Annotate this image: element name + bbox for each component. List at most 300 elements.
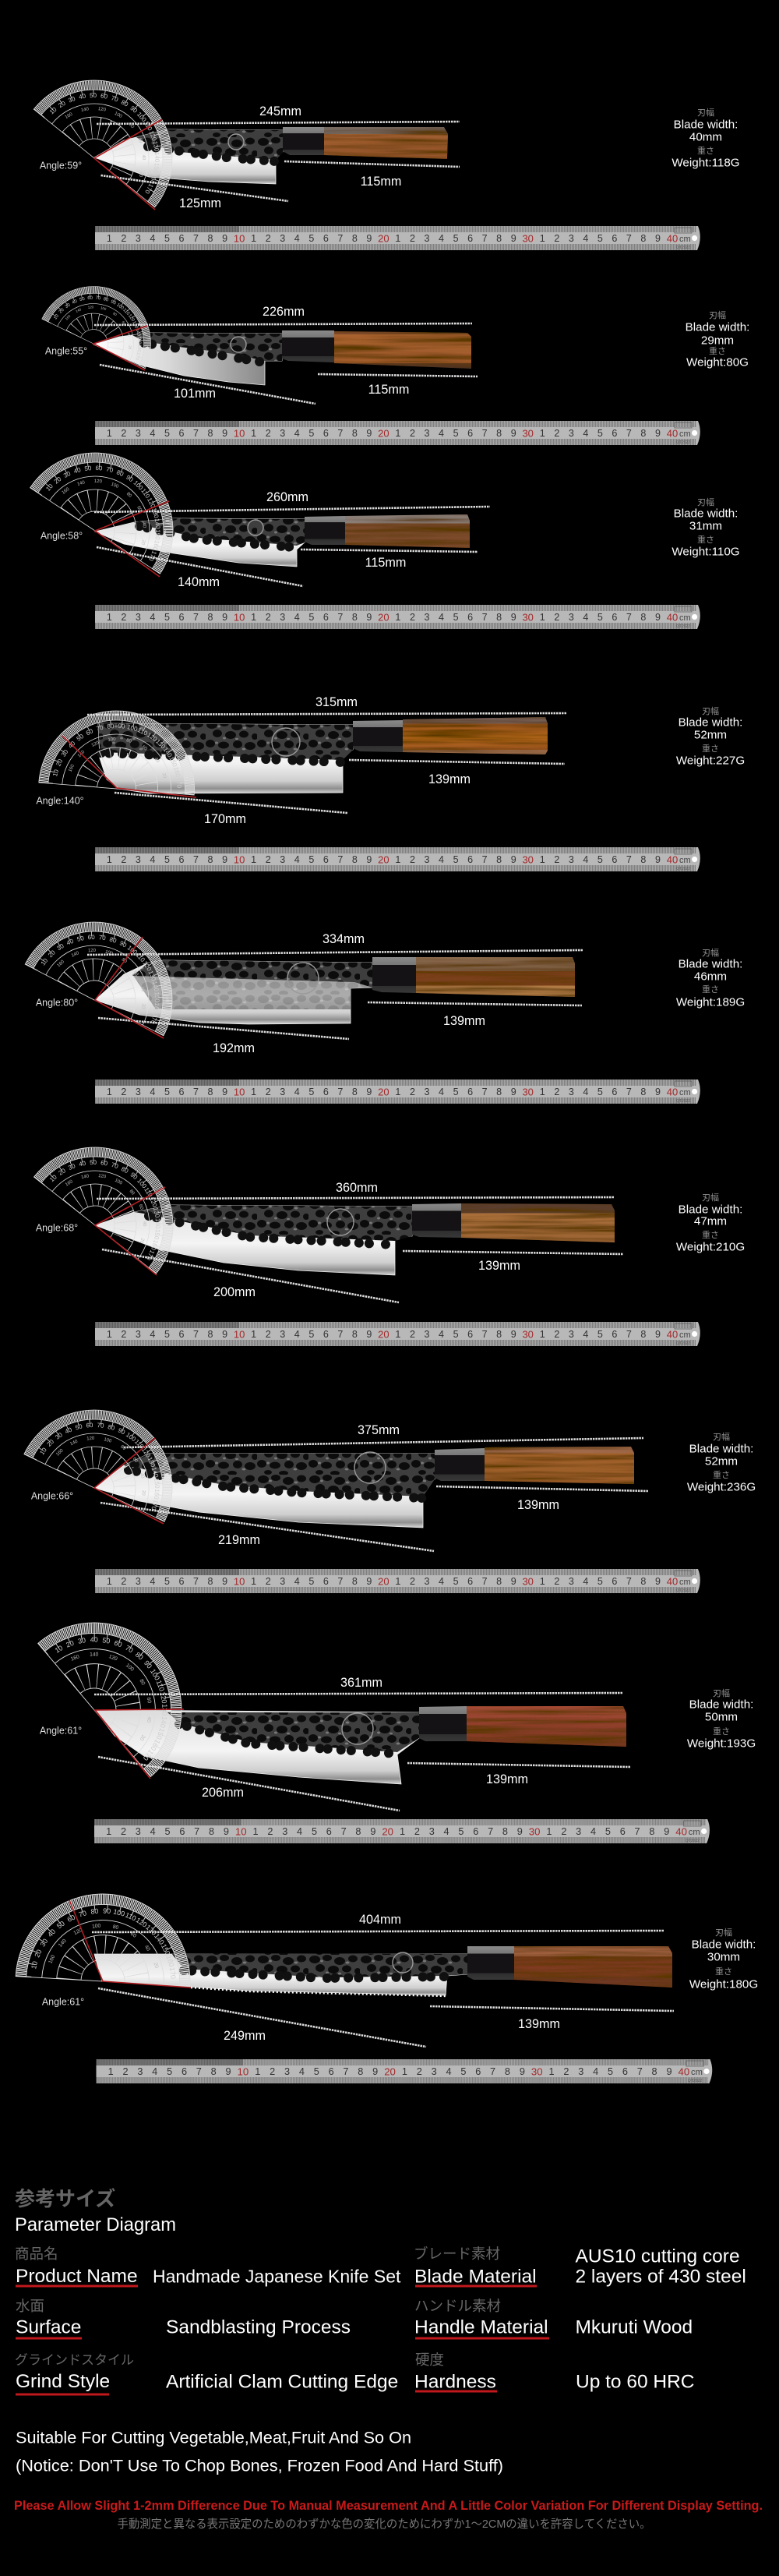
protractor: 80 <box>138 1678 146 1687</box>
protractor: 140 <box>153 152 160 163</box>
ruler: 123456789123456789123456789123456789 <box>107 1329 661 1340</box>
ruler: 40 <box>678 2066 689 2077</box>
panel: knife 6 <box>34 1116 745 1346</box>
protractor: 100 <box>132 479 145 492</box>
ruler: 10 <box>234 611 245 624</box>
row: grind style: Grind Style <box>16 2371 110 2392</box>
length labels: 206mm <box>202 1786 244 1800</box>
protractor: 10 <box>53 313 60 320</box>
protractor: 120 <box>141 959 153 973</box>
protractor: 150 <box>167 756 178 769</box>
protractor: 90 <box>129 1171 139 1181</box>
protractor: 170 <box>147 549 158 563</box>
ruler: 123456789123456789123456789123456789 <box>108 2066 672 2077</box>
blade specs: 刃幅 <box>713 1688 730 1698</box>
ruler: cm <box>679 1330 691 1340</box>
blade specs: Weight:227G <box>676 754 745 767</box>
panel: knife 4 <box>36 695 745 871</box>
protractor: 110 <box>124 1911 137 1922</box>
heading: Parameter Diagram <box>15 2214 176 2235</box>
protractor: 160 <box>165 1954 175 1968</box>
ruler: 40 <box>667 611 678 624</box>
angle marker <box>95 937 164 1038</box>
length labels: 361mm <box>340 1676 382 1690</box>
protractor: 60 <box>100 92 108 101</box>
row: blade material: AUS10 cutting core <box>575 2246 740 2267</box>
protractor: 140 <box>134 328 141 337</box>
ruler: QT2022 <box>676 440 690 445</box>
blade specs: 刃幅 <box>715 1928 732 1938</box>
ruler: 30 <box>522 1576 534 1587</box>
protractor: 100 <box>115 302 125 311</box>
protractor: 160 <box>65 112 74 120</box>
protractor: 160 <box>62 487 71 496</box>
protractor: 10 <box>44 482 55 493</box>
protractor: 120 <box>140 1447 152 1459</box>
protractor: 70 <box>98 934 107 942</box>
ruler: 123456789123456789123456789123456789 <box>107 854 661 865</box>
row: handle material: Mkuruti Wood <box>575 2316 693 2338</box>
blade specs: Weight:110G <box>671 546 740 558</box>
row: handle material: ハンドル素材 <box>414 2298 501 2314</box>
blade specs <box>671 497 740 558</box>
blade <box>95 960 372 1024</box>
blade specs: 52mm <box>705 1454 738 1468</box>
protractor: 50 <box>76 733 86 743</box>
protractor: 170 <box>143 182 155 196</box>
panel: knife 1 <box>33 48 740 250</box>
panel: knife 5 <box>25 895 745 1104</box>
blade <box>95 1710 419 1784</box>
protractor: 70 <box>105 465 115 474</box>
protractor: 40 <box>46 1928 57 1938</box>
ruler: 10 <box>234 427 245 440</box>
protractor: 140 <box>153 518 161 530</box>
protractor: 120 <box>88 305 94 309</box>
protractor: 100 <box>126 944 139 956</box>
ruler <box>95 226 700 250</box>
protractor: 20 <box>128 345 132 350</box>
protractor: 160 <box>70 1654 80 1663</box>
protractor: 130 <box>152 1207 161 1219</box>
protractor: 90 <box>125 474 135 483</box>
protractor: 20 <box>137 171 143 178</box>
protractor: 140 <box>153 1932 166 1946</box>
angle label: Angle:80° <box>36 998 78 1009</box>
protractor: 20 <box>57 100 67 109</box>
length labels: 115mm <box>365 556 406 570</box>
protractor: 130 <box>144 1923 158 1937</box>
row: blade material: 2 layers of 430 steel <box>575 2267 746 2287</box>
protractor: 110 <box>136 726 149 737</box>
protractor: 130 <box>154 738 167 751</box>
protractor: 160 <box>68 763 76 773</box>
row: handle material: Handle Material <box>414 2316 548 2338</box>
protractor: 140 <box>90 1652 99 1658</box>
protractor <box>38 1587 217 1777</box>
length labels: 139mm <box>478 1259 520 1273</box>
length labels <box>204 695 471 826</box>
measure lines <box>87 713 566 813</box>
usage note: Suitable For Cutting Vegetable,Meat,Fruit And So On <box>16 2429 411 2447</box>
protractor: 20 <box>140 1490 146 1496</box>
protractor: 140 <box>77 750 86 758</box>
protractor: 120 <box>148 129 158 143</box>
protractor: 30 <box>77 1636 86 1645</box>
blade specs: 刃幅 <box>702 948 719 958</box>
protractor: 100 <box>104 949 114 956</box>
row: hardness: Up to 60 HRC <box>576 2371 695 2393</box>
blade specs: 重さ <box>697 145 714 156</box>
protractor: 10 <box>48 106 58 116</box>
protractor: 80 <box>107 1423 116 1432</box>
protractor: 120 <box>146 731 159 744</box>
length labels: 139mm <box>518 2017 560 2031</box>
row: hardness: Hardness <box>414 2371 496 2393</box>
blade specs: 重さ <box>715 1966 732 1977</box>
protractor: 40 <box>139 986 145 993</box>
protractor: 100 <box>112 1907 125 1918</box>
protractor: 20 <box>65 1639 75 1649</box>
ruler <box>94 1819 710 1843</box>
ruler: cm <box>691 2068 703 2077</box>
panel: knife 2 <box>42 267 749 445</box>
length labels <box>178 490 406 589</box>
protractor: 80 <box>121 957 128 965</box>
blade specs <box>687 1432 756 1493</box>
protractor: 130 <box>147 970 157 982</box>
blade specs: 30mm <box>707 1950 740 1964</box>
protractor: 50 <box>79 297 86 302</box>
ruler: 10 <box>234 1576 245 1587</box>
blade specs: Blade width: <box>679 957 742 971</box>
protractor: 40 <box>78 1160 86 1168</box>
protractor: 20 <box>139 1733 146 1741</box>
measure lines <box>92 1931 674 2047</box>
ruler: QT2022 <box>676 1099 690 1104</box>
ruler: 30 <box>531 2066 543 2077</box>
protractor: 80 <box>90 1907 99 1916</box>
length labels: 139mm <box>428 772 471 786</box>
protractor: 150 <box>153 529 161 540</box>
protractor: 160 <box>172 766 182 779</box>
protractor <box>24 1384 198 1521</box>
protractor: 20 <box>58 1167 67 1177</box>
blade specs: Weight:80G <box>686 355 749 369</box>
length labels: 115mm <box>368 383 409 397</box>
handle <box>412 1203 615 1242</box>
protractor: 10 <box>38 1446 48 1456</box>
angle label: Angle:61° <box>42 1997 84 2008</box>
blade specs <box>687 1688 756 1751</box>
protractor: 160 <box>136 345 142 353</box>
protractor: 60 <box>113 1639 123 1648</box>
length labels: 360mm <box>336 1181 378 1195</box>
protractor: 80 <box>120 1165 130 1175</box>
protractor: 150 <box>153 1478 160 1489</box>
protractor: 160 <box>57 959 65 968</box>
length labels: 170mm <box>204 812 246 826</box>
ruler: 10 <box>235 1826 247 1837</box>
angle label: Angle:68° <box>36 1222 78 1233</box>
protractor: 100 <box>125 1663 135 1673</box>
blade specs <box>676 706 745 767</box>
angle marker <box>95 1187 165 1275</box>
ruler <box>95 605 700 629</box>
protractor: 10 <box>54 1644 64 1655</box>
row: product name: Product Name <box>16 2266 138 2287</box>
ruler: cm <box>679 235 691 244</box>
ruler: cm <box>679 1578 691 1587</box>
protractor: 30 <box>62 470 72 479</box>
protractor: 120 <box>108 1654 118 1663</box>
blade specs: 刃幅 <box>697 497 714 507</box>
protractor: 80 <box>107 723 115 730</box>
protractor: 120 <box>148 1196 159 1209</box>
ruler: 10 <box>234 232 245 245</box>
protractor: 90 <box>118 723 125 730</box>
measure lines <box>100 1438 648 1551</box>
protractor: 140 <box>154 1218 161 1229</box>
disclaimer japanese: 手動測定と異なる表示設定のためのわずかな色の変化のためにわずか1～2CMの違いを許容してください。 <box>117 2518 651 2531</box>
protractor: 150 <box>152 162 160 174</box>
ruler: cm <box>679 856 691 865</box>
protractor: 80 <box>112 1924 119 1931</box>
protractor: 120 <box>91 740 100 748</box>
length labels <box>224 1913 560 2043</box>
ruler: 20 <box>378 232 390 245</box>
blade specs: 46mm <box>694 970 727 984</box>
protractor: 80 <box>112 311 118 317</box>
protractor: 40 <box>78 93 86 101</box>
protractor: 70 <box>111 1161 119 1170</box>
protractor: 80 <box>125 492 132 499</box>
protractor: 110 <box>143 1186 154 1199</box>
protractor: 20 <box>47 949 57 959</box>
measure lines <box>94 507 490 586</box>
length labels: 200mm <box>213 1285 256 1299</box>
protractor <box>42 267 170 369</box>
row: surface: Surface <box>16 2316 81 2338</box>
length labels: 139mm <box>443 1014 485 1028</box>
angle label: Angle:66° <box>31 1490 73 1501</box>
panel: knife 9 <box>16 1889 758 2083</box>
ruler: 20 <box>378 1576 390 1587</box>
row: blade material: Blade Material <box>414 2267 537 2287</box>
panel: knife 3 <box>30 422 740 629</box>
blade specs: 31mm <box>689 519 722 533</box>
protractor: 40 <box>73 466 82 475</box>
ruler: 30 <box>522 1328 534 1341</box>
protractor: 160 <box>55 1448 65 1458</box>
protractor <box>30 422 203 574</box>
angle marker <box>93 326 147 370</box>
ruler: 20 <box>378 854 390 865</box>
protractor: 140 <box>76 480 86 487</box>
protractor: 160 <box>149 1738 161 1752</box>
length labels <box>218 1423 559 1547</box>
protractor: 140 <box>58 1938 68 1949</box>
protractor: 140 <box>69 1440 79 1447</box>
protractor: 140 <box>159 1716 168 1729</box>
ruler: 10 <box>234 1087 245 1097</box>
row: product name <box>15 2246 401 2287</box>
protractor: 130 <box>146 1456 157 1468</box>
protractor: 60 <box>141 745 148 752</box>
protractor: 60 <box>66 1913 76 1924</box>
protractor: 120 <box>135 1916 149 1929</box>
protractor: 20 <box>33 1949 44 1959</box>
protractor: 40 <box>67 740 77 750</box>
protractor: 10 <box>51 769 60 777</box>
protractor: 40 <box>142 1221 146 1227</box>
row: surface <box>16 2298 351 2340</box>
handle <box>283 127 448 159</box>
protractor: 60 <box>132 970 139 977</box>
ruler: 40 <box>667 1328 678 1341</box>
blade specs: Blade width: <box>689 1698 753 1712</box>
protractor: 30 <box>55 942 65 952</box>
blade specs: 刃幅 <box>697 108 714 118</box>
blade specs: Blade width: <box>674 507 738 521</box>
length labels: 375mm <box>358 1423 400 1437</box>
length labels: 334mm <box>323 932 365 946</box>
length labels: 192mm <box>213 1041 255 1055</box>
angle marker <box>95 501 169 577</box>
protractor: 40 <box>90 1636 98 1644</box>
protractor <box>25 895 199 1036</box>
protractor: 170 <box>142 1748 155 1762</box>
protractor: 80 <box>120 98 130 108</box>
ruler: 20 <box>378 611 390 624</box>
angle marker <box>62 736 196 797</box>
protractor: 150 <box>155 1727 166 1740</box>
blade specs: 47mm <box>694 1214 727 1228</box>
protractor: 70 <box>96 724 104 733</box>
protractor: 50 <box>90 92 97 99</box>
length labels: 125mm <box>179 196 221 210</box>
protractor: 110 <box>155 1679 166 1692</box>
protractor: 140 <box>150 1467 160 1479</box>
protractor: 100 <box>114 1178 123 1186</box>
row: hardness: 硬度 <box>415 2352 444 2368</box>
blade <box>95 1205 412 1275</box>
blade specs: Weight:180G <box>689 1978 758 1991</box>
ruler: cm <box>689 1828 700 1837</box>
angle label: Angle:58° <box>41 530 83 541</box>
blade specs: 重さ <box>702 743 719 754</box>
protractor: 20 <box>55 758 64 767</box>
protractor: 100 <box>136 1177 148 1190</box>
protractor: 100 <box>92 1923 101 1930</box>
ruler: 30 <box>522 611 534 624</box>
protractor: 100 <box>110 482 120 489</box>
row: grind style <box>15 2352 398 2396</box>
ruler: QT2022 <box>676 1588 690 1593</box>
protractor: 90 <box>117 1426 126 1436</box>
protractor: 20 <box>160 772 167 779</box>
protractor: 120 <box>98 1174 107 1179</box>
blade specs: 29mm <box>701 334 734 348</box>
protractor: 120 <box>88 949 97 953</box>
ruler: QT2022 <box>686 1839 700 1843</box>
protractor: 50 <box>84 465 92 472</box>
protractor: 20 <box>53 475 63 486</box>
protractor: 160 <box>48 1954 56 1964</box>
handle <box>305 514 470 548</box>
protractor: 60 <box>95 465 103 472</box>
row: grind style: Artificial Clam Cutting Edge <box>166 2371 398 2393</box>
ruler: 123456789123456789123456789123456789 <box>107 428 661 439</box>
protractor: 20 <box>139 539 146 546</box>
protractor: 70 <box>78 1909 87 1919</box>
ruler: 30 <box>522 1087 534 1097</box>
protractor: 130 <box>150 507 160 519</box>
protractor: 80 <box>115 468 125 478</box>
angle marker <box>69 1900 191 1988</box>
measure lines <box>87 950 583 1039</box>
row: surface: 水面 <box>16 2298 44 2314</box>
blade specs: Blade width: <box>689 1442 753 1456</box>
blade <box>94 1452 435 1528</box>
ruler: 40 <box>667 427 678 440</box>
handle <box>372 957 575 997</box>
protractor: 10 <box>40 957 50 966</box>
ruler: QT2022 <box>676 246 690 250</box>
blade specs: 重さ <box>713 1726 730 1737</box>
protractor: 160 <box>151 539 160 552</box>
blade <box>94 1952 467 1996</box>
protractor: 170 <box>149 1012 159 1025</box>
handle <box>419 1706 626 1747</box>
protractor: 50 <box>55 1920 66 1931</box>
protractor: 120 <box>97 107 107 113</box>
row: surface: Sandblasting Process <box>166 2316 351 2338</box>
protractor: 30 <box>67 1162 77 1171</box>
blade specs: 重さ <box>702 1229 719 1240</box>
angle marker <box>95 1709 184 1779</box>
protractor: 100 <box>100 306 107 311</box>
ruler: QT2022 <box>688 2079 702 2083</box>
handle <box>353 717 548 754</box>
measure lines <box>94 323 478 404</box>
protractor: 40 <box>65 938 75 947</box>
protractor: 20 <box>58 307 65 315</box>
protractor: 140 <box>75 307 83 313</box>
ruler: 40 <box>675 1826 687 1837</box>
length labels <box>179 104 401 210</box>
protractor: 170 <box>144 1249 156 1262</box>
row: blade material: ブレード素材 <box>414 2246 500 2262</box>
protractor: 120 <box>94 479 103 484</box>
blade specs <box>671 108 740 170</box>
protractor: 30 <box>39 1937 49 1948</box>
protractor: 100 <box>126 723 139 733</box>
blade specs: 刃幅 <box>702 1193 719 1203</box>
protractor: 150 <box>153 991 160 1003</box>
protractor: 140 <box>80 107 90 113</box>
ruler: 123456789123456789123456789123456789 <box>107 612 661 623</box>
protractor: 100 <box>103 1437 112 1444</box>
disclaimer english: Please Allow Slight 1-2mm Difference Due To Manual Measurement And A Little Color Variation For Different Display Setting. <box>14 2499 763 2513</box>
protractor: 170 <box>134 352 140 361</box>
protractor: 80 <box>125 738 132 744</box>
handle <box>282 330 471 369</box>
angle label: Angle:55° <box>45 346 87 357</box>
length labels: 226mm <box>263 305 305 319</box>
ruler <box>95 847 700 871</box>
length labels <box>213 932 485 1055</box>
